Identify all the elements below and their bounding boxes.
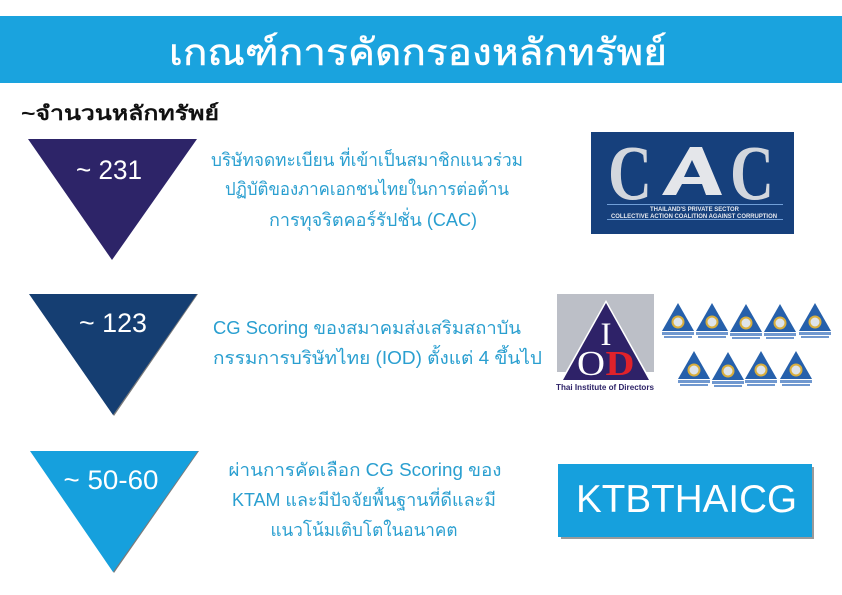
text: IOD description: CG Scoring ของสมาคมส่งเสริมสถาบัน bbox=[213, 318, 521, 338]
logo: KTBTHAICG: KTBTHAICG bbox=[576, 478, 797, 521]
text: IOD description bbox=[213, 318, 542, 368]
logo: KTBTHAICG bbox=[558, 464, 814, 539]
logo: IOD: Thai Institute of Directors bbox=[556, 382, 654, 392]
icons: CG Scoring badges bbox=[662, 303, 831, 387]
text: CAC description: ปฏิบัติของภาคเอกชนไทยในการต่อต้าน bbox=[225, 178, 509, 199]
title banner bbox=[0, 16, 842, 83]
logo: CAC: COLLECTIVE ACTION COALITION AGAINST CORRUPTION bbox=[611, 214, 777, 220]
logo: IOD: I bbox=[600, 317, 612, 353]
logo: CAC: C bbox=[730, 129, 774, 216]
text: KTAM description bbox=[228, 460, 502, 540]
triangle: 231 bbox=[28, 139, 197, 260]
text: CAC description: การทุจริตคอร์รัปชั่น (CAC) bbox=[269, 207, 477, 231]
triangle: 123: ~ 123 bbox=[79, 308, 147, 338]
text: CAC description: บริษัทจดทะเบียน ที่เข้าเป็นสมาชิกแนวร่วม bbox=[211, 147, 523, 170]
text: CAC description bbox=[211, 147, 523, 231]
logo: IOD bbox=[556, 294, 654, 392]
logo: CAC: C bbox=[608, 129, 652, 216]
triangle: 231: ~ 231 bbox=[76, 155, 142, 185]
logo: IOD: O bbox=[577, 344, 605, 383]
text: IOD description: กรรมการบริษัทไทย (IOD) ตั้งแต่ 4 ขึ้นไป bbox=[213, 345, 542, 368]
text: KTAM description: แนวโน้มเติบโตในอนาคต bbox=[270, 519, 458, 540]
logo: IOD: D bbox=[606, 344, 634, 383]
subheading: ~จำนวนหลักทรัพย์ bbox=[21, 102, 219, 125]
triangle: 50-60: ~ 50-60 bbox=[64, 465, 158, 495]
text: KTAM description: KTAM และมีปัจจัยพื้นฐานที่ดีและมี bbox=[232, 487, 496, 511]
triangle: 50-60 bbox=[30, 451, 199, 573]
text: KTAM description: ผ่านการคัดเลือก CG Scoring ของ bbox=[228, 460, 502, 480]
logo: CAC: THAILAND'S PRIVATE SECTOR bbox=[650, 207, 740, 213]
logo: CAC bbox=[591, 129, 794, 234]
title: เกณฑ์การคัดกรองหลักทรัพย์ bbox=[169, 32, 667, 73]
triangle: 123 bbox=[29, 294, 198, 416]
